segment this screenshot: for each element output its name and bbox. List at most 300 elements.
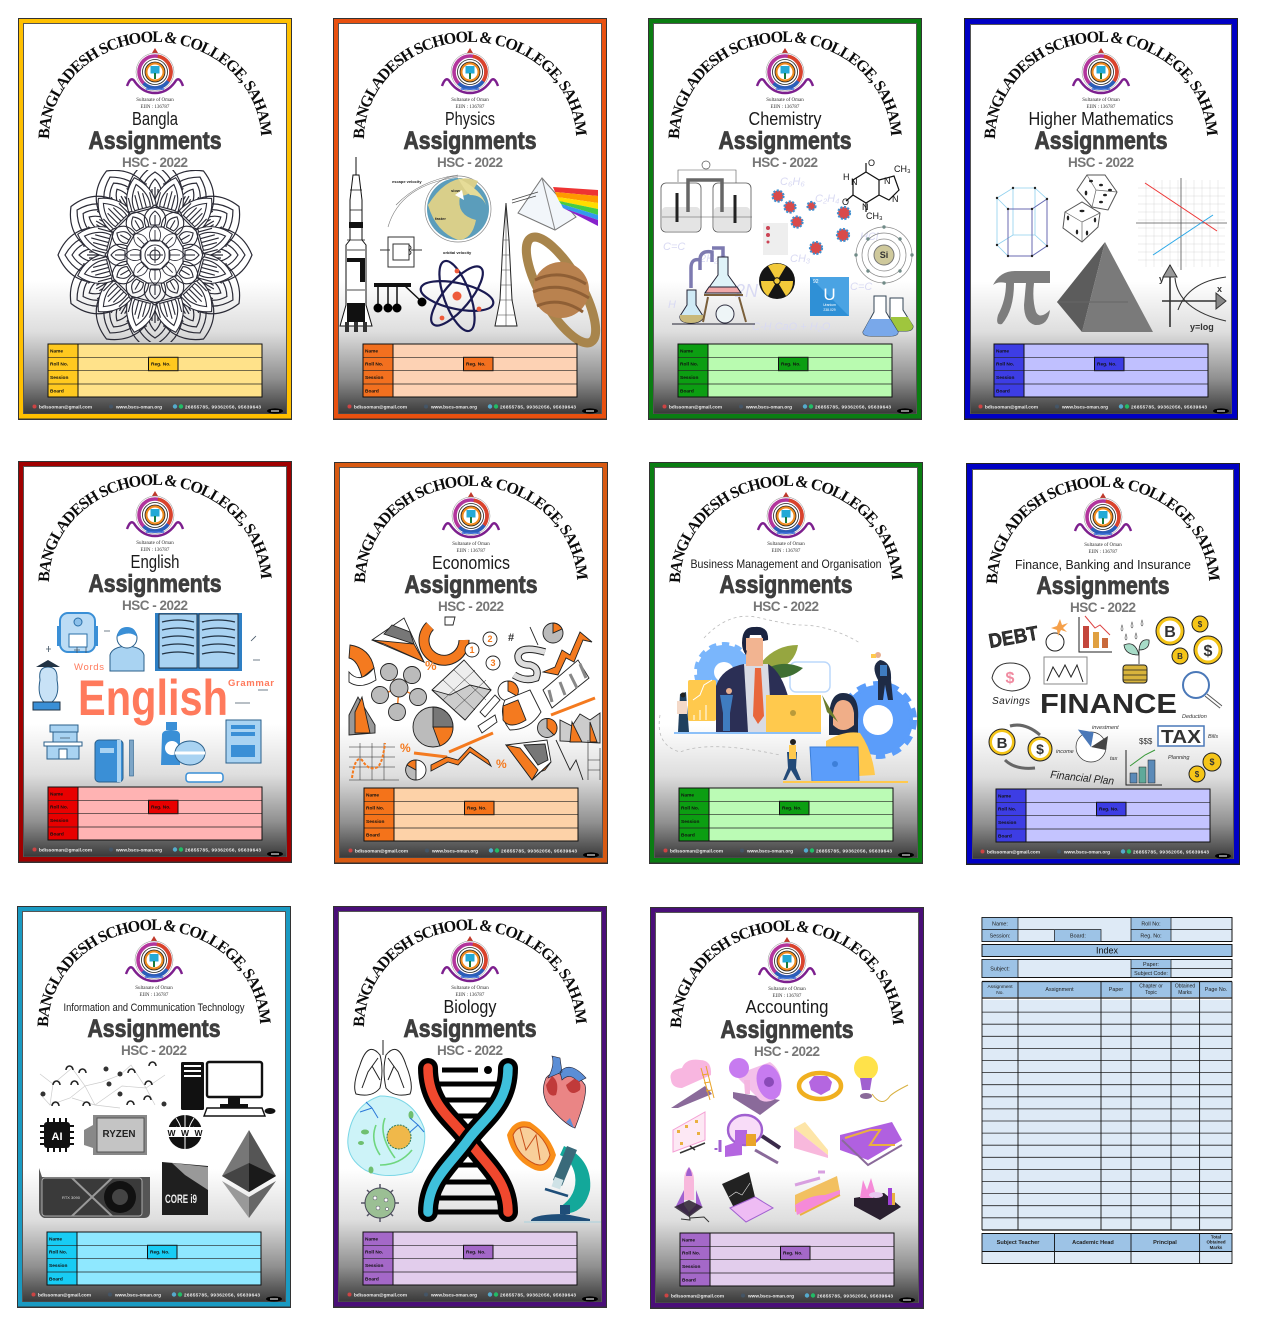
frame — [650, 907, 924, 1309]
title: BANGLADESH SCHOOL & COLLEGE, SAHAM — [38, 31, 272, 139]
form: Name — [49, 1236, 62, 1242]
illustration: finance: B — [1177, 652, 1183, 661]
form: Name — [366, 792, 379, 798]
illustration: mathematics: y=log — [1190, 322, 1214, 332]
illustration: finance: Savings — [992, 696, 1030, 707]
illustration: chemistry: CH₃ — [790, 253, 811, 265]
form: Name — [50, 348, 63, 354]
form: Board — [682, 1278, 696, 1284]
title: Sultanate of Oman — [768, 987, 806, 992]
footer contacts: www.bscs-oman.org — [747, 1294, 794, 1298]
title: BANGLADESH SCHOOL & COLLEGE, SAHAM — [353, 919, 587, 1027]
form: Board — [680, 388, 694, 394]
index heading — [982, 944, 1232, 956]
footer contacts — [980, 849, 1231, 859]
index heading: Index — [1096, 946, 1119, 956]
student details table — [982, 918, 1232, 942]
illustration: chemistry: 2H₂O — [699, 253, 727, 265]
footer contacts: bdissoman@gmail.com — [669, 404, 722, 410]
illustration: chemistry: N — [862, 202, 868, 212]
title: HSC - 2022 — [1070, 600, 1136, 615]
form: Session — [49, 1263, 67, 1269]
illustration: economics: % — [496, 757, 507, 771]
illustration: economics: # — [508, 632, 514, 644]
form: Board — [49, 1276, 63, 1282]
form: Session — [996, 375, 1014, 381]
illustration: chemistry: CH₃ — [866, 211, 883, 221]
title: HSC - 2022 — [122, 598, 188, 613]
form: Name — [996, 348, 1009, 354]
illustration: chemistry: 2N — [734, 281, 759, 301]
subject table: Paper: — [1143, 962, 1159, 968]
title: HSC - 2022 — [437, 1043, 503, 1058]
illustration: mathematics: x — [1217, 284, 1222, 294]
assignment table: No. — [996, 990, 1004, 996]
illustration: business — [659, 616, 913, 782]
illustration: finance: $ — [1036, 741, 1044, 757]
panel: Chemistry cover — [648, 18, 922, 420]
form: Session — [998, 820, 1016, 826]
title: BANGLADESH SCHOOL & COLLEGE, SAHAM — [986, 476, 1220, 584]
form: Board — [996, 388, 1010, 394]
assignment table: Assignment — [987, 984, 1013, 990]
form — [47, 1232, 261, 1285]
form: Name — [680, 348, 693, 354]
title: Economics — [432, 553, 510, 573]
form: Reg. No. — [781, 362, 800, 368]
illustration: chemistry: C₂H₄ — [815, 193, 840, 205]
illustration: finance: B — [997, 735, 1008, 752]
frame — [17, 906, 291, 1308]
panel: Finance cover — [966, 463, 1240, 865]
illustration: english — [33, 613, 274, 782]
form — [48, 344, 262, 397]
student details table: Roll No: — [1141, 922, 1161, 928]
form: Roll No. — [365, 1250, 383, 1256]
title: BANGLADESH SCHOOL & COLLEGE, SAHAM — [37, 919, 271, 1027]
form: Session — [366, 819, 384, 825]
footer contacts: bdissoman@gmail.com — [985, 404, 1038, 410]
illustration: physics: slow — [451, 188, 461, 193]
footer contacts — [978, 404, 1229, 414]
form: Reg. No. — [782, 806, 801, 812]
form: Roll No. — [49, 1250, 67, 1256]
title: HSC - 2022 — [754, 1044, 820, 1059]
illustration: mathematics — [993, 175, 1227, 332]
form: Roll No. — [996, 362, 1014, 368]
subject table — [982, 960, 1232, 978]
illustration: ICT: RTX 3090 — [62, 1195, 81, 1200]
form — [680, 1233, 894, 1286]
panel: Accounting cover — [650, 907, 924, 1309]
title: Finance, Banking and Insurance — [1015, 557, 1191, 572]
title: Assignments — [720, 571, 852, 599]
frame — [649, 462, 923, 864]
assignment table — [982, 982, 1232, 1230]
footer contacts — [664, 848, 914, 858]
signature table: Principal — [1153, 1240, 1177, 1246]
title: HSC - 2022 — [122, 155, 188, 170]
illustration: economics: 3 — [490, 658, 496, 668]
form: Name — [998, 794, 1011, 800]
form — [363, 1232, 577, 1285]
frame — [334, 462, 608, 864]
title: Physics — [445, 109, 495, 129]
panel: Bangla cover — [18, 18, 292, 420]
illustration: finance: income — [1056, 749, 1074, 755]
form: Session — [682, 1264, 700, 1270]
footer contacts — [664, 1293, 915, 1303]
footer contacts: www.bscs-oman.org — [745, 404, 792, 410]
form: Reg. No. — [1097, 362, 1116, 368]
illustration: mandala — [57, 170, 253, 342]
form: Reg. No. — [783, 1250, 802, 1256]
title: EIIN : 136787 — [772, 549, 801, 554]
footer contacts — [32, 847, 283, 857]
title: Chemistry — [748, 109, 822, 129]
panel: Biology cover — [333, 906, 607, 1308]
assignment table: Chapter or — [1139, 984, 1163, 990]
assignment table: Assignment — [1045, 987, 1074, 993]
title: EIIN : 136787 — [456, 105, 485, 110]
title: HSC - 2022 — [1068, 155, 1134, 170]
title: Biology — [444, 997, 496, 1017]
illustration: accounting — [670, 1056, 908, 1222]
footer contacts: 26855785, 99362056, 95639643 — [1133, 850, 1209, 854]
illustration: finance: Financial Plan — [1050, 769, 1115, 788]
title: HSC - 2022 — [752, 155, 818, 170]
panel: ICT cover — [17, 906, 291, 1308]
footer contacts — [32, 404, 283, 414]
illustration: finance: B — [1164, 624, 1176, 641]
title: Business Management and Organisation — [690, 557, 882, 571]
footer contacts: 26855785, 99362056, 95639643 — [185, 404, 261, 410]
footer contacts: www.bscs-oman.org — [430, 1292, 477, 1298]
illustration: chemistry: Uranium — [823, 303, 836, 307]
illustration: chemistry: N — [851, 177, 858, 187]
illustration: chemistry: H — [668, 299, 676, 311]
footer contacts — [32, 1292, 282, 1302]
frame — [966, 463, 1240, 865]
form: Board — [50, 388, 64, 394]
form: Name — [365, 348, 378, 354]
illustration: economics: % — [400, 741, 411, 755]
illustration: english: Words — [74, 662, 104, 673]
form: Roll No. — [998, 806, 1016, 812]
subject table: Subject: — [990, 966, 1010, 972]
form: Board — [365, 1276, 379, 1282]
form: Board — [681, 832, 695, 838]
illustration: finance: $ — [1195, 770, 1200, 779]
form: Reg. No. — [467, 806, 486, 812]
title: EIIN : 136787 — [141, 105, 170, 110]
illustration: chemistry: 238.029 — [823, 308, 836, 312]
panel: assignment index sheet — [982, 918, 1232, 1264]
form: Roll No. — [680, 362, 698, 368]
footer contacts: www.bscs-oman.org — [1063, 850, 1110, 854]
illustration: chemistry: CH₃ — [894, 164, 911, 174]
title: Assignments — [404, 1015, 536, 1043]
footer contacts: www.bscs-oman.org — [746, 848, 793, 854]
form — [679, 788, 893, 841]
title: EIIN : 136787 — [141, 548, 170, 553]
illustration: chemistry: U — [823, 285, 836, 304]
illustration: economics: 2 — [487, 634, 493, 644]
title: Sultanate of Oman — [451, 986, 489, 991]
panel: Physics cover — [333, 18, 607, 420]
illustration: finance: TAX — [1161, 727, 1201, 747]
form: Session — [680, 375, 698, 381]
form: Roll No. — [50, 362, 68, 368]
title: Sultanate of Oman — [136, 98, 174, 103]
frame — [648, 18, 922, 420]
illustration: chemistry: O — [842, 197, 849, 207]
footer contacts: 26855785, 99362056, 95639643 — [1131, 404, 1207, 410]
form: Roll No. — [682, 1250, 700, 1256]
illustration: chemistry: O — [868, 158, 875, 168]
illustration: chemistry: N — [892, 194, 898, 204]
illustration: physics — [340, 157, 608, 352]
footer contacts — [348, 848, 599, 858]
student details table: Board: — [1070, 934, 1086, 940]
footer contacts: bdissoman@gmail.com — [355, 848, 408, 854]
title: Assignments — [1034, 127, 1168, 155]
illustration: finance: $ — [1209, 757, 1215, 767]
title: EIIN : 136787 — [1087, 105, 1116, 110]
footer contacts: www.bscs-oman.org — [115, 404, 162, 410]
form: Session — [50, 818, 68, 824]
title: BANGLADESH SCHOOL & COLLEGE, SAHAM — [670, 920, 904, 1028]
student details table: Reg. No: — [1140, 934, 1162, 940]
illustration: physics: escape velocity — [392, 179, 422, 184]
assignment table: Topic — [1145, 990, 1157, 996]
student details table: Name: — [992, 922, 1008, 928]
title: BANGLADESH SCHOOL & COLLEGE, SAHAM — [38, 474, 272, 582]
illustration: chemistry: C₆H₆ — [780, 176, 805, 188]
illustration: finance: Deduction — [1182, 714, 1207, 720]
illustration: finance: DEBT — [987, 623, 1040, 653]
title: Accounting — [746, 997, 828, 1017]
title: Assignments — [718, 127, 852, 155]
title: Sultanate of Oman — [135, 986, 173, 991]
title: EIIN : 136787 — [140, 993, 169, 998]
title: Sultanate of Oman — [1084, 543, 1122, 548]
signature table: Total — [1211, 1234, 1221, 1240]
illustration: physics: faster — [435, 216, 446, 221]
title: English — [130, 552, 180, 572]
form: Session — [681, 819, 699, 825]
footer contacts: 26855785, 99362056, 95639643 — [817, 1294, 893, 1298]
illustration: chemistry: 92 — [813, 279, 819, 285]
footer contacts: 26855785, 99362056, 95639643 — [500, 404, 576, 410]
footer contacts: 26855785, 99362056, 95639643 — [500, 1292, 576, 1298]
illustration: economics: % — [425, 658, 437, 673]
title: Assignments — [720, 1016, 854, 1044]
footer contacts: bdissoman@gmail.com — [38, 1292, 91, 1298]
form: Reg. No. — [466, 1250, 485, 1256]
footer contacts: 26855785, 99362056, 95639643 — [184, 1292, 260, 1298]
title: BANGLADESH SCHOOL & COLLEGE, SAHAM — [353, 31, 587, 139]
title: HSC - 2022 — [121, 1043, 187, 1058]
form — [994, 344, 1208, 397]
form: Board — [50, 832, 64, 838]
form: Session — [365, 1263, 383, 1269]
title: Bangla — [132, 109, 179, 129]
title: HSC - 2022 — [437, 155, 503, 170]
footer contacts: www.bscs-oman.org — [431, 848, 478, 854]
illustration: finance — [987, 616, 1222, 788]
form: Reg. No. — [151, 362, 170, 368]
form — [364, 788, 578, 841]
signature table — [982, 1234, 1232, 1264]
illustration: finance: FINANCE — [1040, 688, 1177, 719]
title: Sultanate of Oman — [766, 98, 804, 103]
panel: Economics cover — [334, 462, 608, 864]
illustration: finance: $$$ — [1139, 737, 1153, 746]
title: Sultanate of Oman — [767, 542, 805, 547]
frame — [333, 18, 607, 420]
illustration: ICT — [39, 1062, 276, 1218]
title: BANGLADESH SCHOOL & COLLEGE, SAHAM — [668, 31, 902, 139]
title: EIIN : 136787 — [457, 549, 486, 554]
illustration: chemistry: H — [843, 172, 850, 182]
illustration: ICT: AI — [52, 1131, 62, 1143]
title: Sultanate of Oman — [136, 541, 174, 546]
title: Assignments — [404, 571, 538, 599]
title: Assignments — [404, 127, 536, 155]
illustration: chemistry: C=C — [663, 241, 685, 253]
illustration: ICT: RYZEN — [102, 1129, 136, 1140]
signature table: Subject Teacher — [997, 1240, 1040, 1246]
assignment table: Paper — [1109, 987, 1123, 993]
signature table: Obtained — [1206, 1240, 1226, 1244]
signature table: Academic Head — [1072, 1240, 1114, 1246]
frame — [18, 461, 292, 863]
title: BANGLADESH SCHOOL & COLLEGE, SAHAM — [669, 475, 903, 583]
form — [996, 789, 1210, 842]
panel: Higher Mathematics cover — [964, 18, 1238, 420]
title: Higher Mathematics — [1028, 109, 1174, 129]
form: Board — [366, 832, 380, 838]
illustration: chemistry: HCl — [860, 231, 879, 243]
footer contacts: www.bscs-oman.org — [1061, 404, 1108, 410]
footer contacts: 26855785, 99362056, 95639643 — [501, 848, 577, 854]
title: Sultanate of Oman — [452, 542, 490, 547]
form: Board — [365, 388, 379, 394]
footer contacts: 26855785, 99362056, 95639643 — [815, 404, 891, 410]
student details table: Session: — [990, 934, 1010, 940]
title: BANGLADESH SCHOOL & COLLEGE, SAHAM — [354, 475, 588, 583]
form: Reg. No. — [151, 804, 170, 810]
form — [678, 344, 892, 397]
title: HSC - 2022 — [753, 599, 819, 614]
footer contacts — [348, 1292, 598, 1302]
form: Session — [365, 375, 383, 381]
footer contacts: www.bscs-oman.org — [430, 404, 477, 410]
title: Sultanate of Oman — [1082, 98, 1120, 103]
frame — [333, 906, 607, 1308]
title: Assignments — [88, 127, 222, 155]
illustration: finance: $ — [1204, 643, 1213, 660]
form — [48, 787, 262, 840]
illustration: finance: Bills — [1208, 734, 1218, 740]
illustration: finance: $ — [1198, 620, 1203, 629]
title: HSC - 2022 — [438, 599, 504, 614]
form: Roll No. — [366, 806, 384, 812]
title: EIIN : 136787 — [456, 993, 485, 998]
title: EIIN : 136787 — [771, 105, 800, 110]
title: Sultanate of Oman — [451, 98, 489, 103]
panel: Business Management cover — [649, 462, 923, 864]
form: Name — [365, 1236, 378, 1242]
title: Assignments — [1036, 572, 1170, 600]
assignment table: Marks — [1178, 990, 1192, 996]
panel: English cover — [18, 461, 292, 863]
assignment table: Obtained — [1175, 984, 1195, 990]
illustration: physics: orbital velocity — [443, 250, 472, 255]
form: Name — [682, 1238, 695, 1244]
footer contacts: bdissoman@gmail.com — [670, 848, 723, 854]
illustration: chemistry — [661, 158, 914, 336]
illustration: ICT: WWW — [168, 1128, 203, 1138]
form: Reg. No. — [1099, 806, 1118, 812]
frame — [964, 18, 1238, 420]
title: Assignments — [88, 570, 222, 598]
footer contacts: www.bscs-oman.org — [115, 848, 162, 852]
footer contacts: bdissoman@gmail.com — [354, 1292, 407, 1298]
footer contacts: bdissoman@gmail.com — [354, 404, 407, 410]
footer contacts: www.bscs-oman.org — [114, 1292, 161, 1298]
illustration: mathematics: y — [1159, 274, 1164, 284]
illustration: biology — [348, 1040, 601, 1222]
illustration: english: English — [78, 670, 228, 726]
illustration: chemistry: C=C — [850, 281, 872, 293]
illustration: finance: $ — [1006, 670, 1015, 687]
form: Name — [50, 792, 63, 798]
illustration: finance: investment — [1092, 725, 1119, 731]
form: Reg. No. — [466, 362, 485, 368]
signature table: Marks — [1210, 1245, 1223, 1250]
form: Session — [50, 375, 68, 381]
form: Reg. No. — [150, 1250, 169, 1256]
footer contacts: bdissoman@gmail.com — [671, 1294, 724, 1298]
title: EIIN : 136787 — [773, 994, 802, 999]
illustration: english: Grammar — [228, 678, 274, 689]
footer contacts: 26855785, 99362056, 95639643 — [816, 848, 892, 854]
form: Board — [998, 834, 1012, 840]
illustration: ICT: CORE i9 — [165, 1192, 197, 1206]
illustration: finance: tax — [1110, 756, 1118, 762]
illustration: finance: Planning — [1168, 755, 1190, 761]
subject table: Subject Code: — [1134, 971, 1168, 977]
illustration: chemistry: N — [884, 176, 890, 186]
title: EIIN : 136787 — [1089, 550, 1118, 555]
footer contacts: 26855785, 99362056, 95639643 — [185, 848, 261, 852]
footer contacts: bdissoman@gmail.com — [987, 850, 1040, 854]
assignment table: Page No. — [1205, 987, 1227, 993]
footer contacts: bdissoman@gmail.com — [39, 404, 92, 410]
illustration: economics: 1 — [469, 645, 475, 655]
form: Roll No. — [681, 806, 699, 812]
form: Name — [681, 792, 694, 798]
title: Assignments — [88, 1015, 220, 1043]
form: Roll No. — [365, 362, 383, 368]
frame — [18, 18, 292, 420]
title: Information and Communication Technology — [64, 1002, 245, 1014]
illustration: chemistry: Si — [880, 250, 888, 260]
footer contacts — [348, 404, 598, 414]
illustration: chemistry: C-H CaO + H₂O — [752, 321, 831, 333]
